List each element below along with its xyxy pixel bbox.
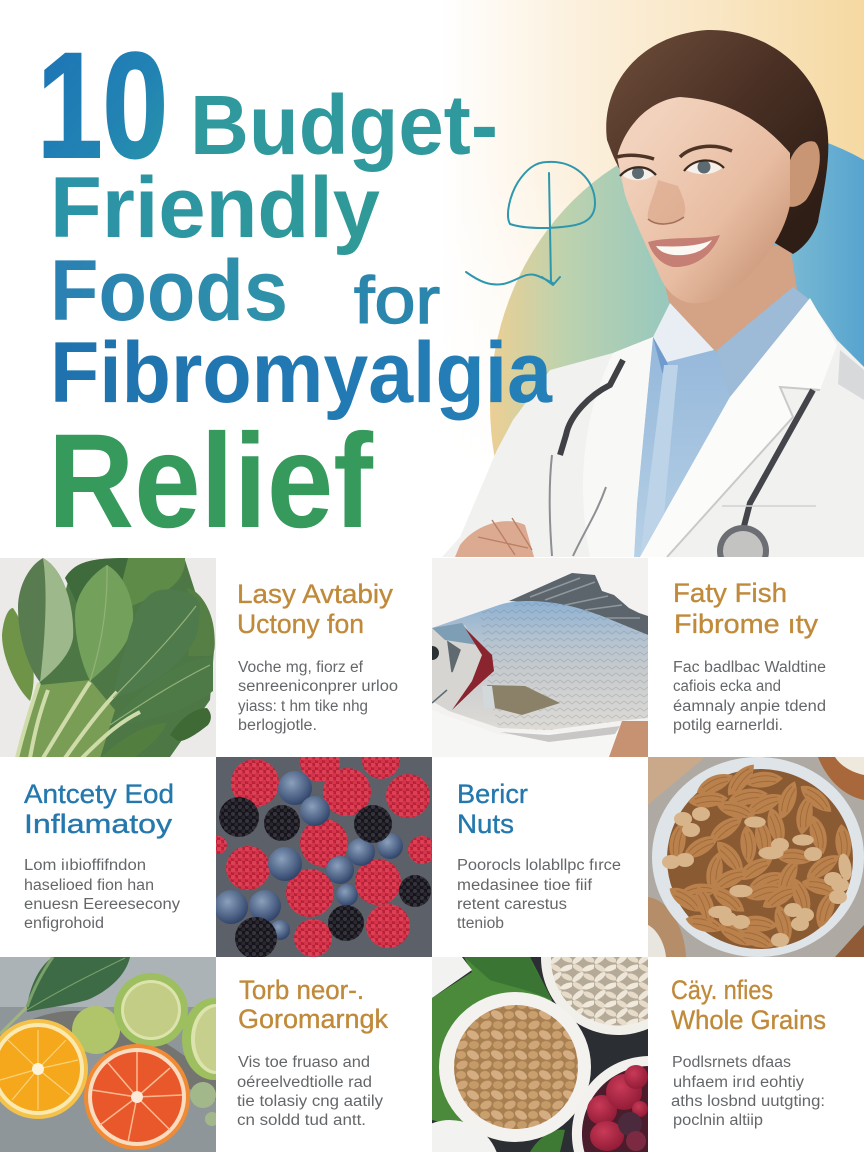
body copy: yiass: t hm tike nhg [238,698,368,715]
shirt collar left [653,303,714,362]
body copy: éamnaly anpie tdend [673,698,826,715]
body copy: Podlsrnets dfaas [672,1054,791,1071]
body copy: enuesn Eereesecony [24,896,180,913]
body copy: cn soldd tud antt. [237,1112,366,1129]
shirt placket [640,365,678,557]
brows [617,155,654,159]
body copy: berlogjotle. [238,717,317,734]
body copy: Vis toe fruaso and [238,1054,370,1071]
heading: Fibrome ıty [674,609,819,639]
title word for: for [354,263,440,337]
halved orange [0,1019,88,1119]
face [617,97,790,303]
heading: Nuts [457,809,514,839]
dorsal fin [509,573,648,635]
stethoscope chest piece [717,525,769,557]
heading: Torb neor-. [239,975,364,1005]
title [37,21,553,556]
title word Friendly: Friendly [50,160,380,256]
heading: Uctony fon [237,609,364,639]
fish shadow [500,726,620,742]
title word Budget-: Budget- [190,78,498,172]
body copy: aths losbnd uutgting: [671,1093,825,1110]
body copy: cafiois ecka and [673,678,781,695]
image: bowls of whole grains [432,957,648,1152]
eye [432,646,439,660]
berry bowl [572,1056,648,1152]
shirt collar right [717,287,809,352]
halved lime [114,973,188,1047]
heading [24,779,174,839]
heading: Inflamatoy [24,809,173,839]
body copy: Poorocls lolabllpc fırce [457,857,621,874]
heading [238,975,388,1034]
body copy: haselioed fion han [24,877,154,894]
heading: Antcety Eod [24,779,174,809]
title number 10: 10 [37,21,168,189]
heading [457,779,528,839]
body copy [237,1054,383,1129]
image: citrus fruits [0,957,246,1152]
body copy: medasinee tioe fiif [457,877,593,894]
body copy: retent carestus [457,896,567,913]
body copy [457,857,621,932]
text block: Bericr Nuts [457,779,621,932]
doctor portrait [442,30,864,577]
fish head [432,625,482,688]
ear [786,141,820,207]
pale grain bowl [541,957,648,1035]
body copy [673,659,826,734]
text block: Whole Grains [671,975,826,1129]
heading: Lasy Avtabiy [237,579,394,609]
hair and bun [606,30,828,254]
gill [452,628,494,710]
right coat edge shade [838,350,864,400]
title word Foods: Foods [50,243,288,339]
stethoscope tube left [560,360,623,455]
fish body [432,601,648,730]
body copy: tteniob [457,915,504,932]
head markings [432,642,460,703]
image: fatty fish [425,558,648,757]
whole lime [72,1006,120,1054]
blue shirt [634,338,737,557]
pectoral fin [487,685,560,715]
body copy: potilg earnerldi. [673,717,783,734]
body copy: Lom iıbioffifndon [24,857,146,874]
body copy [24,857,180,932]
small limes [190,1082,216,1108]
blackberries [219,797,431,959]
body copy: Fac badlbac Waldtine [673,659,826,676]
fish scales [480,601,648,730]
hand at fish tail [609,721,648,757]
image: bowl of nuts [648,757,864,957]
body copy: senreeniconprer urloo [238,678,398,695]
peach background wash [430,0,864,470]
shirt under fish [432,710,620,757]
right lime half [182,998,246,1080]
mouth [648,235,720,267]
heading: Cäy. nfies [671,975,773,1005]
image: mixed berries [216,757,432,957]
text block: Faty Fish [673,578,826,734]
body copy: poclnin altiip [673,1112,763,1129]
title word Fibromyalgia: Fibromyalgia [50,325,553,421]
almonds [662,759,854,953]
leaf [27,957,130,1012]
stethoscope tube right [743,390,813,530]
body copy: tie tolasiy cng aatily [237,1093,383,1110]
crossed hand [455,521,534,557]
left coat panel [613,337,653,556]
text block: Lasy Avtabiy [237,579,398,734]
leaves [432,957,552,1130]
white dish top left [432,957,472,998]
leaf stem [0,1007,27,1034]
left eye [622,168,654,180]
coat pocket [722,505,816,507]
blueberries [214,771,403,940]
tan grain bowl [439,992,591,1142]
heading: Whole Grains [671,1005,826,1035]
bowl rim [652,757,864,957]
text block: Torb neor- [237,975,388,1129]
text block: Antcety Eod [24,779,180,932]
heading: Goromarngk [238,1004,388,1034]
heading [673,578,819,639]
hand-drawn teal swirl [466,162,595,285]
raspberries [216,757,432,957]
image: spinach leaves [0,558,216,758]
heading: Bericr [457,779,528,809]
title word Relief: Relief [48,407,373,556]
nose [648,180,685,224]
body copy: uhfaem irıd eohtiy [673,1074,804,1091]
white dish corner [432,1120,497,1152]
halved grapefruit [84,1044,190,1150]
body copy: oéreelvedtiolle rad [237,1074,372,1091]
body copy [238,659,398,734]
right lapel [640,298,837,557]
peach fade to white [430,170,570,470]
wood corners [648,757,705,805]
body copy: Voche mg, fiorz ef [238,659,364,676]
body copy: enfigrohoid [24,915,104,932]
body copy [671,1054,825,1129]
gradient circle behind doctor [490,143,864,456]
heading [237,579,394,639]
lab coat [442,300,864,557]
heading [671,975,826,1035]
heading: Faty Fish [673,578,787,608]
neck [665,245,797,352]
right eye [686,162,722,174]
